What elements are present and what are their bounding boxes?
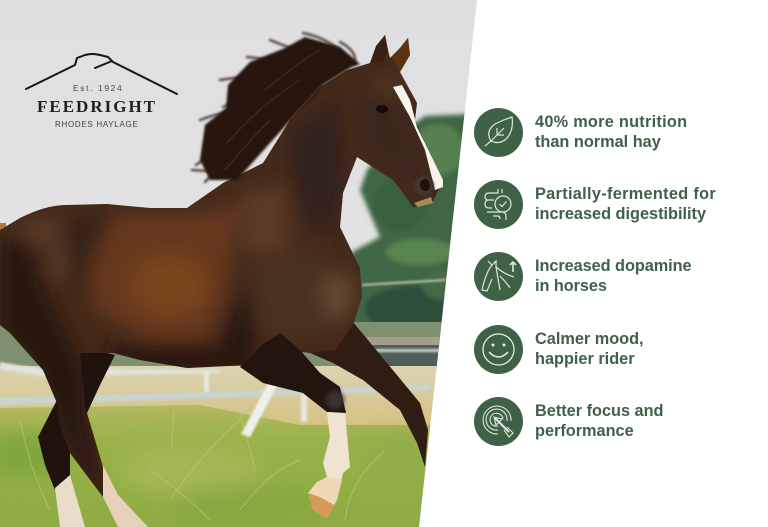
near fore sock xyxy=(323,412,350,500)
icon: smiley face xyxy=(474,325,523,374)
near foreleg xyxy=(240,333,346,413)
icon: gut with check xyxy=(474,180,523,229)
benefit text: digestibility: Partially-fermented for xyxy=(535,185,716,203)
far hind leg xyxy=(38,345,115,490)
far foreleg xyxy=(310,322,428,467)
logo: product name: RHODES HAYLAGE xyxy=(55,120,138,129)
benefit text: nutrition xyxy=(535,113,687,151)
benefit text: focus: performance xyxy=(535,422,634,440)
logo icon: mountain line xyxy=(25,53,178,95)
mane xyxy=(192,33,360,182)
icon: target with arrow xyxy=(474,397,523,446)
horse body xyxy=(0,35,443,510)
benefit text: mood xyxy=(535,330,644,368)
near hind sock xyxy=(103,465,148,527)
grass xyxy=(0,405,430,527)
near fore hoof xyxy=(308,477,342,518)
blaze xyxy=(393,85,443,190)
benefit text: focus: Better focus and xyxy=(535,402,663,420)
logo: Feedright Rhodes Haylage xyxy=(25,53,178,129)
coat shading xyxy=(0,80,430,520)
benefit text: dopamine xyxy=(535,257,692,295)
fence xyxy=(0,279,446,437)
eye xyxy=(376,105,388,113)
far hind sock xyxy=(55,475,85,527)
benefit text: focus xyxy=(535,402,663,440)
benefit text: dopamine: Increased dopamine xyxy=(535,257,692,275)
panel: horse photograph xyxy=(0,0,477,527)
benefit text: digestibility xyxy=(535,185,716,223)
tail tip xyxy=(0,223,6,230)
grass blades xyxy=(20,395,385,520)
benefit text: digestibility: increased digestibility xyxy=(535,205,706,223)
tree xyxy=(350,114,470,340)
logo: established year: Est. 1924 xyxy=(73,83,123,93)
benefit text: nutrition: than normal hay xyxy=(535,133,661,151)
benefit text: mood: Calmer mood, xyxy=(535,330,644,348)
muzzle xyxy=(414,176,434,196)
distant field xyxy=(0,322,480,372)
icon: horse with up arrow xyxy=(474,252,523,301)
ears xyxy=(370,35,388,63)
benefit text: dopamine: in horses xyxy=(535,277,607,295)
near foreleg knee xyxy=(326,391,344,409)
icon: leaf xyxy=(474,108,523,157)
horse xyxy=(0,33,443,527)
benefit text: nutrition: 40% more nutrition xyxy=(535,113,687,131)
logo: brand name: FEEDRIGHT xyxy=(37,97,157,116)
benefit text: mood: happier rider xyxy=(535,350,635,368)
